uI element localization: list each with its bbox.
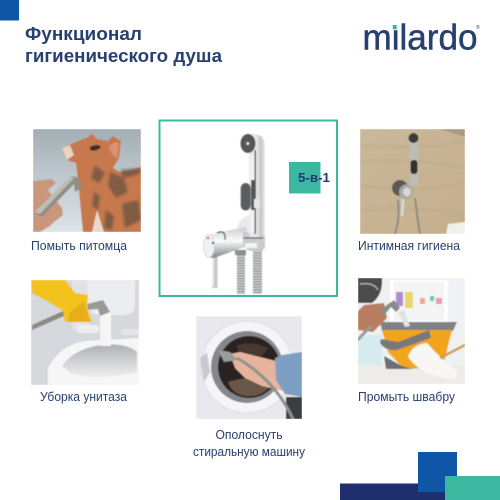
photo: cat being showered bbox=[33, 129, 141, 232]
corner accent: bottom-right blocks bbox=[340, 452, 500, 500]
panel: clean toilet bbox=[31, 280, 139, 404]
logo: milardo: ® bbox=[476, 24, 480, 31]
photo: orange mop bucket bbox=[358, 278, 465, 384]
icon: hygienic shower product bbox=[204, 134, 265, 294]
panel: intimate hygiene bbox=[358, 129, 465, 253]
logo: milardo: milardo bbox=[362, 16, 478, 58]
label: Уборка унитаза bbox=[40, 389, 128, 404]
label bbox=[193, 427, 305, 459]
label: стиральную машину bbox=[193, 444, 305, 459]
photo: hand in washing machine bbox=[196, 316, 302, 419]
badge: 5-в-1: 5-в-1 bbox=[298, 170, 330, 185]
panel: rinse washing machine bbox=[193, 316, 305, 459]
corner accent: top-left blue square bbox=[0, 0, 19, 20]
title: гигиенического душа bbox=[25, 46, 223, 66]
label: Интимная гигиена bbox=[358, 238, 461, 253]
label: Ополоснуть bbox=[216, 427, 283, 442]
label: Помыть питомца bbox=[31, 238, 128, 253]
photo: toilet cleaning with yellow glove bbox=[31, 280, 139, 385]
label: Промыть швабру bbox=[358, 389, 455, 404]
badge: 5-в-1 bbox=[289, 162, 330, 194]
panel: wash mop bbox=[358, 278, 465, 404]
title: Функционал bbox=[25, 24, 142, 44]
panel: wash pet bbox=[31, 129, 141, 253]
photo: shower on wooden wall bbox=[360, 129, 465, 234]
title bbox=[25, 24, 223, 66]
panel: central product frame bbox=[160, 120, 337, 296]
